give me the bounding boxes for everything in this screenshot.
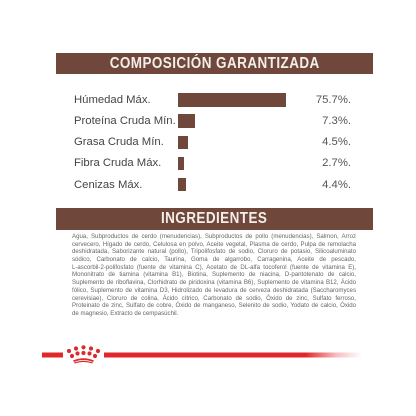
heading: composición garantizada [56,53,373,74]
text block: ingredient list: deshidratada, Saborizante natural (pollo), Tripolifosfato de sodio, Cloruro de potasio, Silicoaluminato [72,248,356,255]
bar: humedad [178,93,286,107]
text block: ingredient list: fólico, Suplemento de vitamina D3, Hidrolizado de levadura de cerveza deshidratada (Saccharomyces [72,287,356,294]
bar: cenizas [178,178,186,191]
label: grasa: Grasa Cruda Mín. [74,136,164,148]
value: humedad: 75.7%. [316,94,351,106]
value: proteina: 7.3%. [322,115,351,127]
logo: red line with crown [42,345,358,364]
text block: ingredient list: Suplemento de riboflavina, Clorhidrato de piridoxina (vitamina B6), Suplemento de vitamina B12, Ácido [72,279,356,286]
label: humedad: Húmedad Máx. [74,94,151,106]
text block: ingredient list: Agua, Subproductos de cerdo (menudencias), Subproductos de pollo (menudencias), Salmon, Arroz [72,233,356,240]
heading: ingredientes: INGREDIENTES [161,210,268,227]
bar: fibra [178,157,184,170]
heading: ingredientes [56,208,373,230]
text block: ingredient list: Proteinato de zinc, Sulfato de cobre, Óxido de manganeso, Selenito de sodio, Yodato de calcio, Óxido [72,302,356,309]
text block: ingredient list: cervecero, Hígado de cerdo, Celulosa en polvo, Aceite vegetal, Plasma de cerdo, Pulpa de remolacha [72,241,356,248]
text block: ingredient list: L-ascorbil-2-polifosfato (fuente de vitamina C), Acetato de DL-alfa tocoferol (fuente de vitamina E), [72,264,356,271]
bar: proteina [178,114,195,128]
heading: composición garantizada: COMPOSICIÓN GARANTIZADA [109,55,320,72]
bar: grasa [178,136,188,149]
text block: ingredient list [72,233,356,317]
text block: ingredient list: sódico, Carbonato de calcio, Taurina, Goma de algarrobo, Carragenina, Aceite de pescado, [72,256,356,263]
text block: ingredient list: de magnesio, Extracto de cempasúchil. [72,310,178,317]
text block: ingredient list: cerevisiae), Cloruro de colina, Ácido cítrico, Carbonato de sodio, Óxido de zinc, Sulfato ferroso, [72,295,356,302]
text block: ingredient list: Mononitrato de tiamina (vitamina B1), Biotina, Suplemento de niacina, D-pantotenato de calcio, [72,271,356,278]
value: cenizas: 4.4%. [322,179,351,191]
label: proteina: Proteína Cruda Mín. [74,115,176,127]
label: fibra: Fibra Cruda Máx. [74,157,161,169]
value: grasa: 4.5%. [322,136,351,148]
value: fibra: 2.7%. [322,157,351,169]
label: cenizas: Cenizas Máx. [74,179,142,191]
